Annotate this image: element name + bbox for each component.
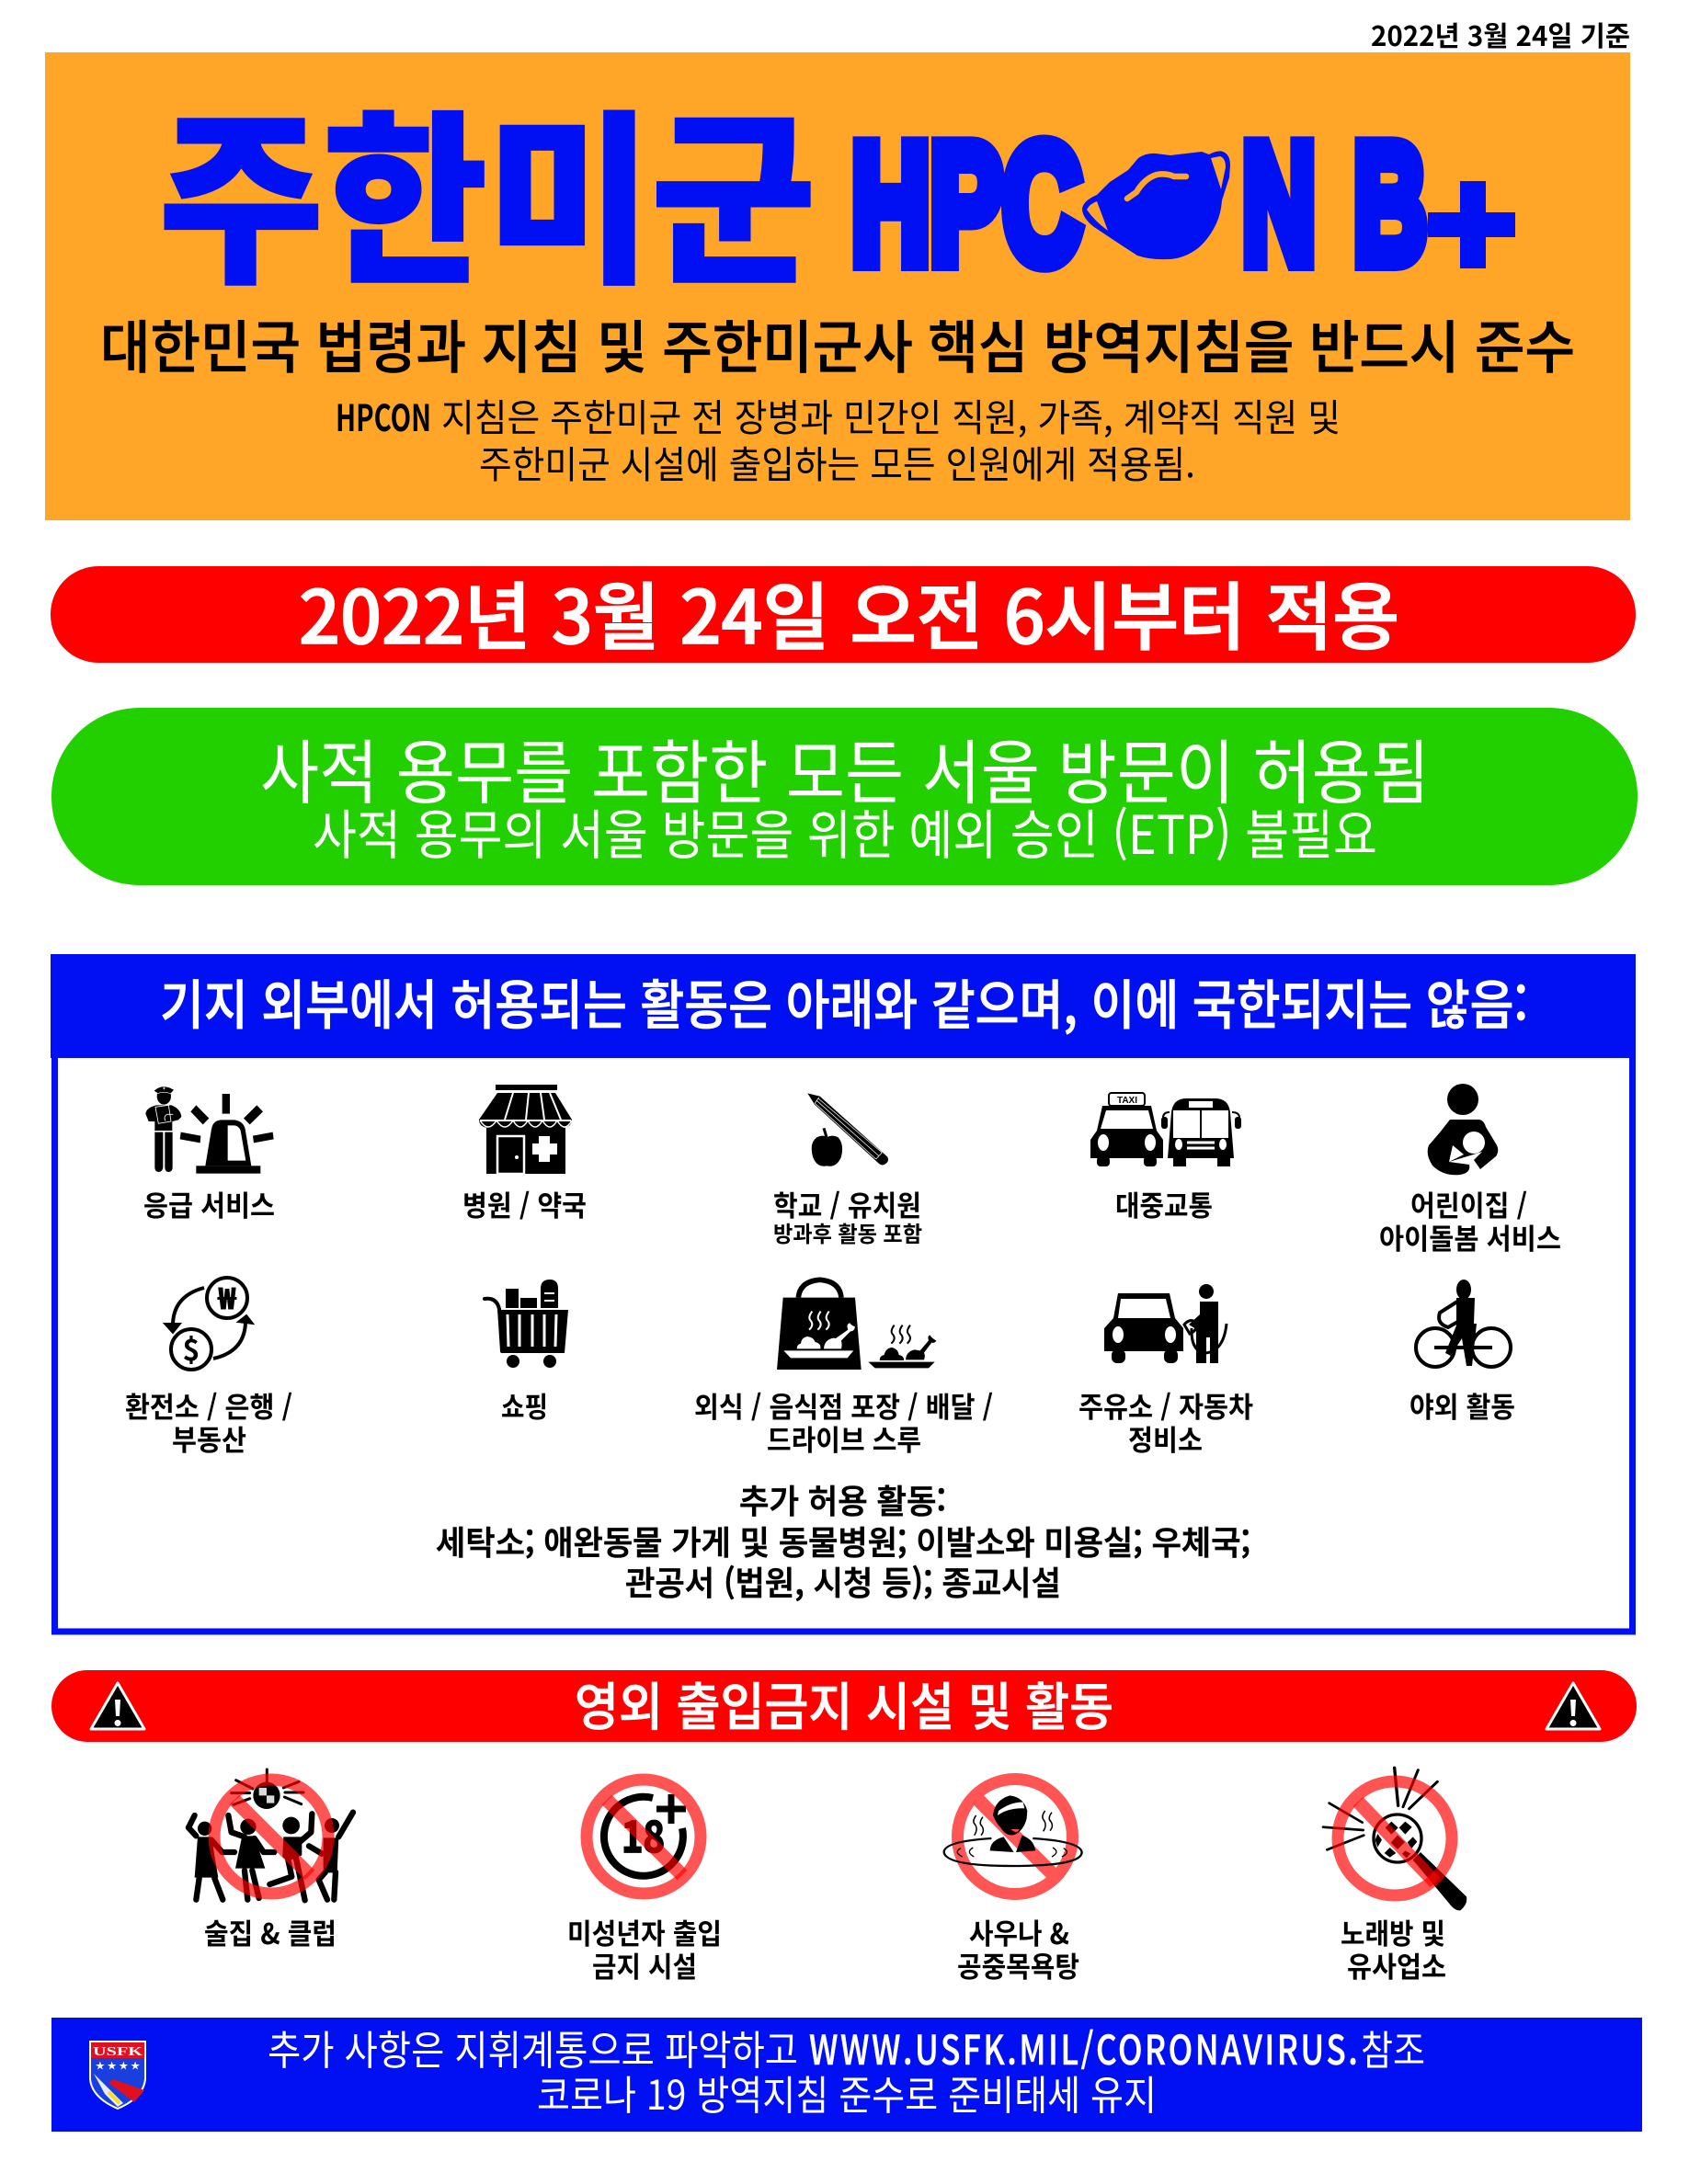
icon: shopping cart	[485, 1280, 568, 1368]
icon: no under-18: 18	[622, 1804, 665, 1865]
icon: warning triangle left	[91, 1683, 144, 1729]
off-limits labels: 공중목욕탕	[957, 1944, 1079, 1985]
permitted heading: 기지 외부에서 허용되는 활동은 아래와 같으며, 이에 국한되지는 않음:	[160, 962, 1528, 1040]
icon: USFK shield logo	[90, 2042, 145, 2109]
off-limits labels: 금지 시설	[592, 1944, 697, 1985]
icon: no bars and clubs	[188, 1769, 353, 1900]
activity labels row 2: 부동산	[172, 1417, 246, 1459]
off-limits labels: 미성년자 출입	[567, 1911, 722, 1952]
scope text: 주한미군 시설에 출입하는 모든 인원에게 적용됨.	[479, 434, 1195, 489]
additional permitted activities	[436, 1475, 1250, 1605]
icon: currency exchange: $	[183, 1327, 200, 1370]
icon: USFK shield logo: ★ ★ ★ ★	[96, 2062, 140, 2072]
footer text: 코로나 19 방역지침 준수로 준비태세 유지	[537, 2063, 1157, 2121]
additional permitted activities: 추가 허용 활동:	[739, 1475, 946, 1523]
off-limits labels	[204, 1911, 1446, 1985]
additional permitted activities: 관공서 (법원, 시청 등); 종교시설	[625, 1557, 1061, 1605]
icon: outdoor cycling	[1416, 1280, 1511, 1367]
icon: no karaoke	[1323, 1768, 1466, 1910]
icon: face mask as letter O	[1082, 151, 1230, 259]
activity labels row 1: 병원 / 약국	[462, 1183, 587, 1224]
footer text: 참조	[1361, 2018, 1425, 2076]
icon: currency exchange	[165, 1276, 253, 1370]
title: HPC: HPC	[851, 108, 1081, 298]
panel: footer banner	[51, 2018, 1642, 2132]
activity labels row 2	[125, 1384, 1515, 1459]
panel: off-limits banner	[51, 1666, 1637, 1742]
activity labels row 2: 외식 / 음식점 포장 / 배달 /	[694, 1384, 993, 1426]
off-limits labels: 술집 & 클럽	[204, 1911, 337, 1952]
off-limits heading: 영외 출입금지 시설 및 활동	[575, 1666, 1113, 1741]
title: N: N	[1242, 108, 1316, 298]
notice sub-line: 사적 용무의 서울 방문을 위한 예외 승인 (ETP) 불필요	[313, 792, 1377, 870]
activity labels row 1: 응급 서비스	[143, 1183, 275, 1224]
activity labels row 1: 대중교통	[1115, 1183, 1213, 1224]
activity labels row 2: 드라이브 스루	[767, 1417, 921, 1459]
notice headline: 사적 용무를 포함한 모든 서울 방문이 허용됨	[260, 717, 1430, 818]
activity labels row 2: 정비소	[1128, 1417, 1203, 1459]
activity labels row 1	[143, 1183, 1561, 1257]
title: B+: B	[1353, 108, 1427, 298]
panel: orange title banner	[45, 52, 1630, 520]
off-limits labels: 사우나 &	[969, 1911, 1069, 1952]
off-limits labels: 노래방 및	[1341, 1911, 1445, 1952]
footer text: WWW.USFK.MIL/CORONAVIRUS.	[809, 2019, 1358, 2076]
footer text: 추가 사항은 지휘계통으로 파악하고	[268, 2018, 798, 2076]
icon: hospital and pharmacy	[479, 1085, 572, 1174]
activity labels row 1: 방과후 활동 포함	[773, 1216, 922, 1248]
scope text: HPCON	[336, 389, 431, 442]
panel: effective date pill: 2022년 3월 24일 오전 6시부터 적용	[299, 559, 1399, 665]
activity labels row 1: 아이돌봄 서비스	[1379, 1216, 1561, 1257]
subheading: 대한민국 법령과 지침 및 주한미군사 핵심 방역지침을 반드시 준수	[100, 301, 1575, 384]
icon: taxi and bus	[1090, 1093, 1241, 1166]
footer text	[268, 2018, 1425, 2121]
icon: no under-18	[587, 1780, 701, 1894]
scope text	[336, 387, 1341, 489]
off-limits labels: 유사업소	[1347, 1944, 1446, 1985]
panel: green notice pill	[51, 708, 1638, 885]
icon: warning triangle right	[1546, 1683, 1600, 1729]
icon: emergency services	[145, 1086, 274, 1174]
icon: USFK shield logo: USFK	[93, 2045, 143, 2059]
icon: no saunas	[944, 1780, 1082, 1894]
icon: taxi and bus: TAXI	[1117, 1096, 1137, 1106]
icon: restaurants and takeout	[777, 1280, 936, 1370]
additional permitted activities: 세탁소; 애완동물 가게 및 동물병원; 이발소와 미용실; 우체국;	[436, 1517, 1250, 1564]
panel: permitted activities frame	[51, 954, 1636, 1632]
icon: currency exchange: ₩	[218, 1276, 237, 1318]
activity labels row 2: 쇼핑	[501, 1384, 548, 1426]
activity labels row 1: 어린이집 /	[1410, 1183, 1527, 1224]
date stamp: 2022년 3월 24일 기준	[1371, 14, 1630, 54]
icon: childcare	[1428, 1084, 1498, 1175]
activity labels row 2: 주유소 / 자동차	[1078, 1384, 1253, 1426]
activity labels row 1: 학교 / 유치원	[773, 1183, 921, 1224]
icon: school pencil and apple	[807, 1093, 888, 1166]
icon: gas station	[1104, 1284, 1227, 1363]
activity labels row 2: 야외 활동	[1409, 1384, 1515, 1426]
scope text: 지침은 주한미군 전 장병과 민간인 직원, 가족, 계약직 직원 및	[441, 387, 1341, 442]
activity labels row 2: 환전소 / 은행 /	[125, 1384, 292, 1426]
title: 주한미군: 주한미군	[159, 53, 816, 320]
